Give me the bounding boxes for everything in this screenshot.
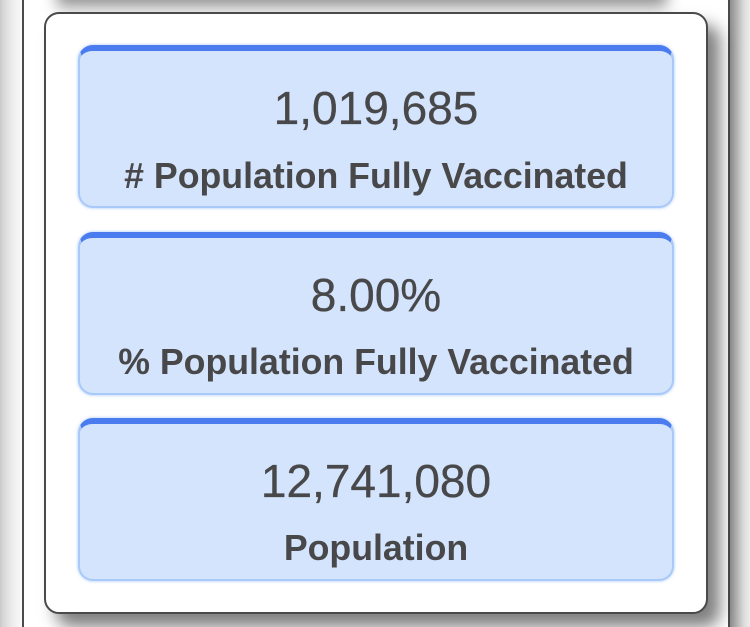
- value: population: 12,741,080: [261, 455, 491, 507]
- label: percent vaccinated: % Population Fully Vaccinated: [118, 342, 634, 382]
- tile: population: [78, 418, 674, 581]
- tile: population fully vaccinated count: [78, 45, 674, 208]
- tile: percent population fully vaccinated: [78, 232, 674, 395]
- value: percent vaccinated: 8.00%: [311, 269, 441, 321]
- left edge shading: [0, 0, 22, 627]
- value: fully vaccinated count: 1,019,685: [274, 82, 478, 134]
- label: fully vaccinated count: # Population Fully Vaccinated: [124, 156, 628, 196]
- right edge shading: [730, 0, 750, 627]
- label: population: Population: [284, 528, 468, 568]
